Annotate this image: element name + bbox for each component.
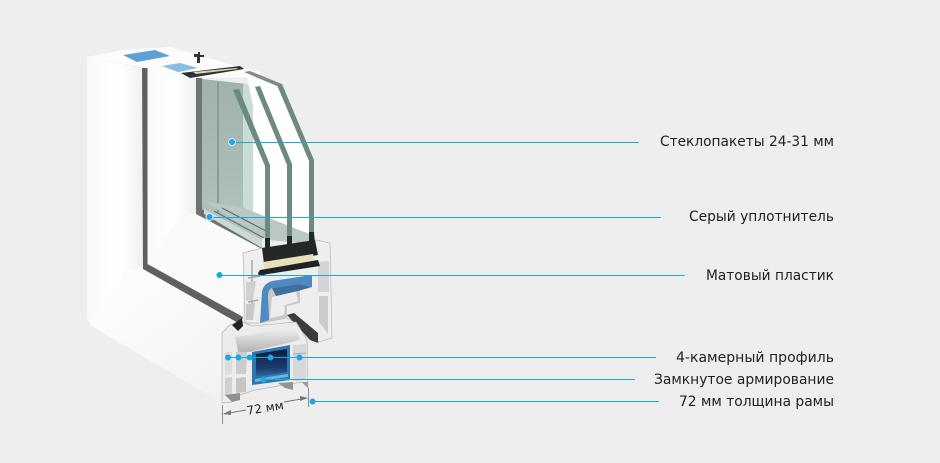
outer frame vertical face: [87, 57, 143, 325]
pane 2: [255, 86, 292, 242]
leader: matte plastic: [216, 272, 685, 278]
right wall: [293, 344, 306, 381]
label: glass units: Стеклопакеты 24-31 мм: [660, 134, 834, 150]
top edge of panes: [244, 71, 282, 86]
sash vertical face: [147, 68, 196, 264]
leader: frame thickness: [310, 398, 659, 404]
window profile cutaway: [87, 47, 332, 424]
rear glass: [202, 79, 262, 241]
blue steel top left: [123, 50, 170, 62]
left wall chambers: [225, 352, 232, 375]
leader: closed reinforcement: [260, 376, 635, 382]
sash right chambers: [318, 261, 329, 292]
reinforcement steel: [252, 345, 290, 385]
leader: 4-chamber profile: [225, 354, 656, 360]
top hardware: [194, 52, 204, 63]
grey glass seal: [196, 78, 262, 249]
leader: grey seal: [206, 214, 661, 220]
top chamber: [235, 327, 300, 352]
grey gasket: [142, 68, 243, 324]
label: closed reinforcement: Замкнутое армирование: [654, 372, 834, 388]
leader: glass units: [228, 138, 639, 146]
white between panes: [247, 76, 313, 236]
sash left chambers: [248, 260, 260, 320]
pane 3: [277, 84, 314, 238]
outer frame bottom face: [90, 268, 241, 403]
label: 4-chamber profile: 4-камерный профиль: [676, 350, 834, 366]
sash steel: [260, 275, 312, 323]
frame gasket: [287, 313, 318, 343]
top cut of profile: [87, 47, 260, 78]
dimension 72 mm: 72 мм: [246, 398, 285, 418]
frame section: [222, 318, 308, 403]
dimension 72 mm: [222, 388, 308, 424]
frame feet: [225, 393, 240, 402]
pane 1: [233, 89, 270, 242]
sealing unit: [262, 240, 318, 264]
label: frame thickness: 72 мм толщина рамы: [679, 394, 834, 410]
blue steel top right: [162, 63, 198, 72]
label: matte plastic: Матовый пластик: [706, 268, 834, 284]
sash section: [243, 232, 332, 343]
label: grey seal: Серый уплотнитель: [689, 209, 834, 225]
frame seal: [232, 318, 243, 331]
sash bottom face: [148, 213, 262, 318]
glass floor lines: [214, 208, 266, 238]
sash cavity: [262, 277, 312, 322]
top glazing bead: [181, 66, 244, 78]
